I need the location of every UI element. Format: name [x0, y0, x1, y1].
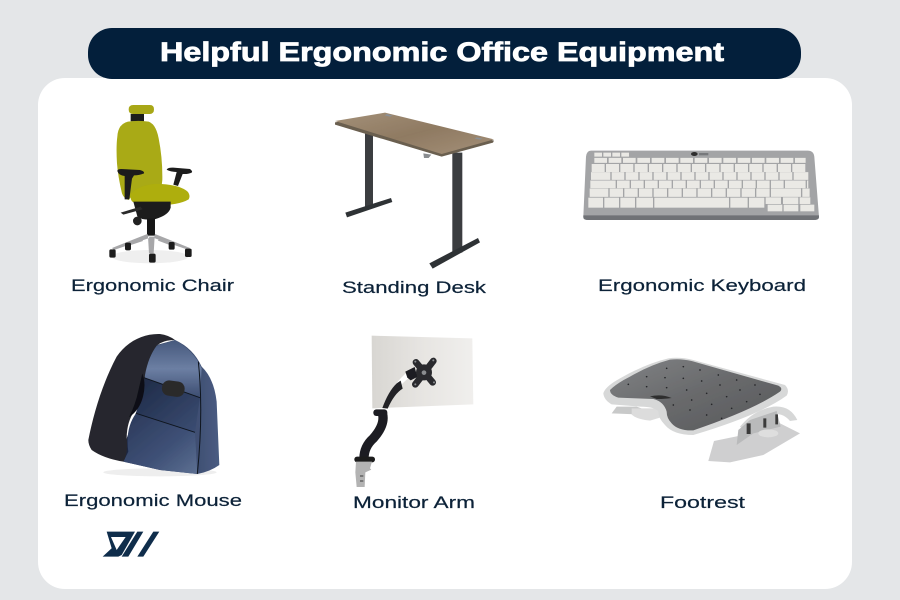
label: ergonomic mouse: Ergonomic Mouse [64, 491, 242, 510]
item: monitor arm [353, 336, 475, 512]
item: footrest [603, 358, 800, 512]
icon: footrest [603, 358, 800, 462]
title banner: Helpful Ergonomic Office Equipment [160, 37, 724, 67]
label: ergonomic chair: Ergonomic Chair [71, 276, 234, 295]
label: monitor arm: Monitor Arm [353, 493, 475, 512]
icon: monitor arm [354, 336, 473, 487]
icon: standing desk [335, 113, 494, 269]
item: ergonomic keyboard [583, 151, 819, 295]
icon: ergonomic mouse [88, 334, 219, 476]
item: standing desk [335, 113, 494, 297]
icon: ergonomic keyboard [583, 151, 819, 220]
panel: white content card [38, 78, 852, 589]
icon: company logo [103, 532, 159, 557]
label: footrest: Footrest [660, 493, 745, 512]
title banner [88, 28, 801, 79]
label: standing desk: Standing Desk [342, 278, 487, 297]
icon: ergonomic chair [109, 105, 192, 263]
item: ergonomic chair [71, 105, 234, 295]
label: ergonomic keyboard: Ergonomic Keyboard [598, 276, 806, 295]
item: ergonomic mouse [64, 334, 242, 510]
